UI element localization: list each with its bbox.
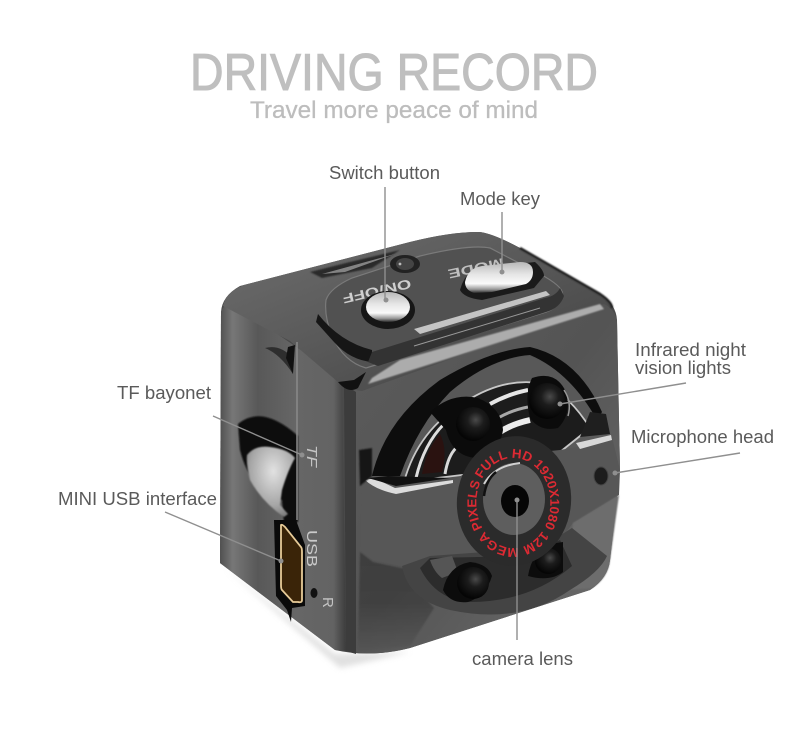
front face bbox=[345, 304, 620, 653]
top face bbox=[223, 232, 612, 392]
infrared LED bottom left bbox=[443, 562, 492, 602]
lower right lighter plate bbox=[566, 495, 619, 590]
dome gray band bbox=[398, 356, 598, 492]
label: infrared night vision lights: vision lights bbox=[635, 358, 731, 378]
switch button bbox=[361, 291, 415, 329]
label: MINI USB interface: MINI USB interface bbox=[58, 489, 217, 509]
title: DRIVING RECORD bbox=[190, 44, 598, 102]
lower dome inner bbox=[420, 540, 572, 602]
label: microphone head: Microphone head bbox=[631, 427, 774, 447]
mode key bbox=[460, 262, 544, 300]
lower dome latch bbox=[430, 556, 458, 578]
TF label: TF bbox=[303, 445, 320, 468]
top right edge shade bbox=[520, 248, 612, 308]
label: mode key: Mode key bbox=[460, 189, 540, 209]
dome chrome arcs bbox=[416, 390, 530, 478]
camera body silhouette bbox=[220, 232, 620, 654]
label: camera lens: camera lens bbox=[472, 649, 573, 669]
leader line: TF bayonet bbox=[213, 416, 304, 458]
R label: R bbox=[319, 597, 336, 608]
dome maroon inset bbox=[422, 434, 445, 474]
lower left sheen bbox=[358, 552, 434, 652]
black wedge left bbox=[359, 448, 372, 486]
centre plate silver strip left bbox=[365, 479, 453, 494]
soft bottom shadow bbox=[225, 568, 410, 668]
top vent slot bbox=[310, 250, 400, 278]
dome black crescent bbox=[372, 347, 602, 476]
TF slot dark area bbox=[238, 416, 298, 524]
microphone hole bbox=[594, 467, 608, 485]
button panel bbox=[316, 247, 564, 368]
label: TF bayonet: TF bayonet bbox=[117, 383, 211, 403]
left face recess bbox=[265, 347, 293, 374]
lens opening bbox=[501, 485, 529, 517]
MODE label: MODE bbox=[446, 255, 505, 282]
dome inner recess bbox=[404, 382, 590, 482]
top edge highlights bbox=[368, 304, 604, 384]
leader line: switch button bbox=[384, 187, 388, 302]
leader line: infrared bbox=[558, 383, 686, 406]
infrared LED top right bbox=[527, 376, 569, 429]
centre plate right dark piece bbox=[580, 412, 610, 437]
leader line: lens bbox=[514, 498, 520, 640]
ON/OFF label: ON/OFF bbox=[341, 276, 413, 306]
MINI USB port bbox=[274, 520, 305, 622]
camera bbox=[220, 232, 620, 669]
lower dome bbox=[402, 528, 607, 614]
reset hole bbox=[310, 588, 318, 598]
TF bayonet teardrop bbox=[247, 447, 295, 517]
subtitle: Travel more peace of mind bbox=[250, 97, 538, 124]
label: infrared night vision lights bbox=[635, 340, 746, 378]
label: switch button: Switch button bbox=[329, 163, 440, 183]
lens ring bbox=[456, 436, 572, 562]
infrared LED top left bbox=[430, 397, 503, 458]
centre plate silver strip right bbox=[576, 435, 612, 449]
USB label: USB bbox=[303, 530, 320, 567]
lens ring red text: FULL HD 1920X1080 12M MEGA PIXELS bbox=[467, 448, 560, 557]
leader line: USB bbox=[165, 512, 284, 564]
leader line: mode key bbox=[500, 212, 504, 274]
small screw bbox=[390, 255, 420, 273]
infrared LED bottom right bbox=[528, 542, 563, 578]
label: infrared night vision lights: Infrared night bbox=[635, 340, 746, 360]
lens housing bbox=[483, 463, 545, 535]
leader line: microphone bbox=[612, 453, 740, 476]
centre plate bbox=[360, 437, 620, 577]
front edge strip bbox=[344, 384, 356, 654]
seam between panels bbox=[296, 342, 298, 520]
left face bbox=[220, 305, 346, 651]
